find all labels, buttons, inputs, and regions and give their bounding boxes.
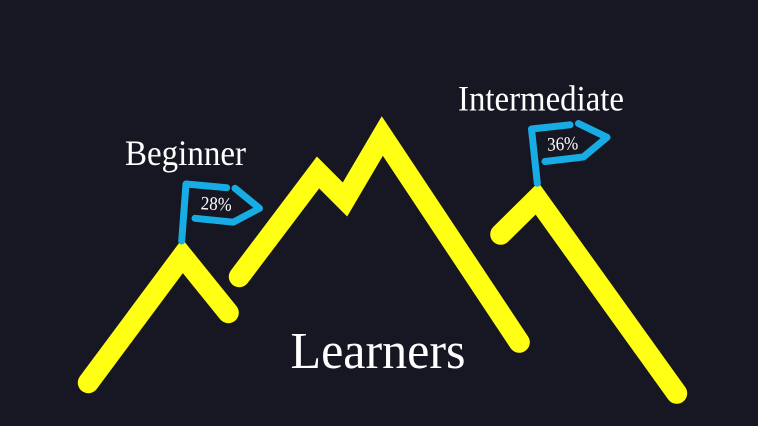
mountain: left peak [88,256,228,383]
mountain: centre peaks [239,136,519,342]
heading: Beginner: Beginner [125,133,246,173]
flag label: 36%: 36% [547,133,579,156]
heading: Intermediate: Intermediate [458,79,624,119]
flag: beginner [182,184,260,241]
flag label: 28%: 28% [200,193,232,216]
mountain: right peak [501,198,677,393]
title: Learners: Learners [290,323,466,380]
flag: intermediate [532,124,607,183]
